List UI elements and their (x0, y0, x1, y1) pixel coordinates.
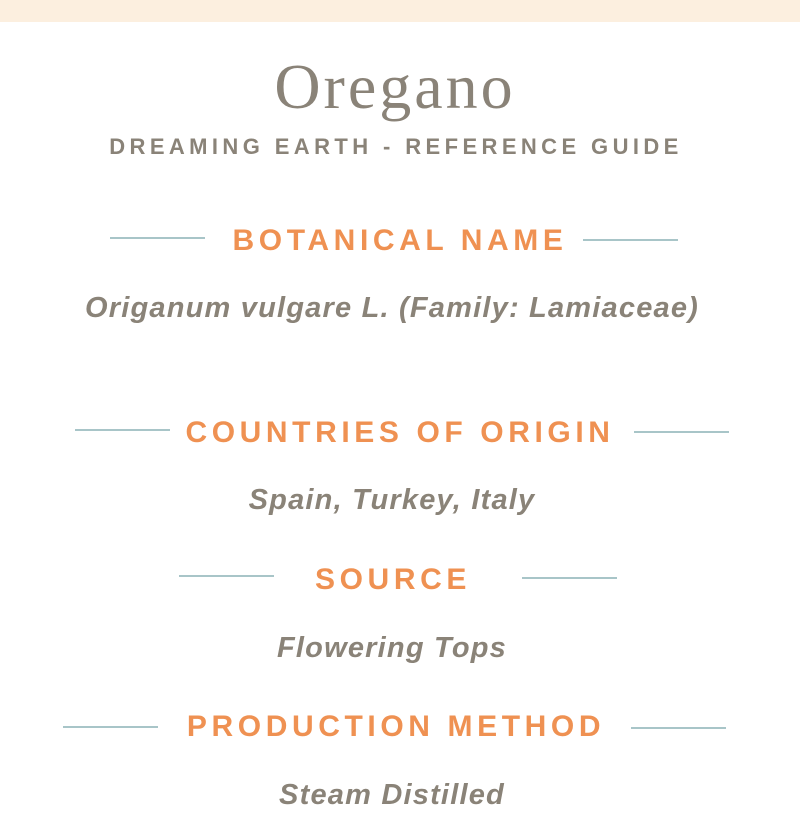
heading: botanical name: BOTANICAL NAME (233, 224, 567, 257)
subtitle: DREAMING EARTH - REFERENCE GUIDE (109, 134, 683, 159)
section: production method (63, 710, 726, 811)
section: source (179, 563, 617, 664)
value: botanical name: Origanum vulgare L. (Family: Lamiaceae) (85, 292, 699, 324)
value: countries: Spain, Turkey, Italy (249, 484, 535, 516)
heading: production method: PRODUCTION METHOD (187, 710, 605, 743)
value: source: Flowering Tops (277, 632, 507, 664)
top band (0, 0, 800, 22)
section: botanical name (85, 224, 699, 324)
title: Oregano (274, 51, 516, 122)
section: countries (75, 416, 729, 516)
heading: source: SOURCE (315, 563, 471, 596)
value: production method: Steam Distilled (279, 779, 505, 811)
heading: countries: COUNTRIES OF ORIGIN (185, 416, 615, 449)
